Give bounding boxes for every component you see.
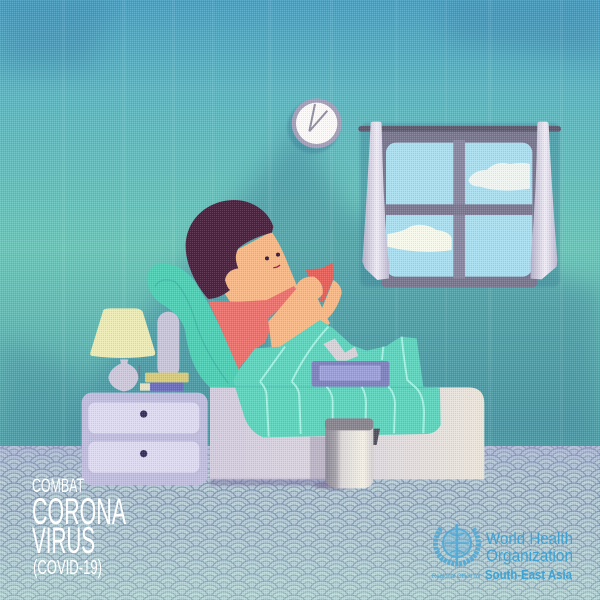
bed: [210, 387, 484, 485]
book: [306, 263, 334, 303]
lamp: [90, 308, 155, 391]
nightstand body: [82, 393, 208, 485]
blanket: [233, 320, 441, 437]
face: [220, 232, 297, 305]
WHO logo: [432, 524, 573, 582]
tissue paper: [323, 338, 358, 361]
trash can: [313, 418, 380, 489]
left hand: [296, 277, 323, 301]
eyes: [265, 256, 269, 260]
WHO logo: Organization: [486, 546, 573, 565]
books: [140, 373, 189, 391]
campaign title: COMBAT: [32, 476, 84, 497]
shirt: [208, 286, 297, 369]
pillow: [157, 312, 179, 378]
right hand: [320, 280, 342, 321]
wall background: [0, 0, 600, 450]
tissue box: [312, 361, 389, 387]
window: [358, 122, 561, 287]
hair: [186, 200, 273, 299]
arm: [268, 288, 330, 350]
campaign title: (COVID-19): [33, 557, 102, 579]
nightstand and items: [82, 308, 208, 485]
curtain rod: [358, 126, 561, 132]
WHO logo: Regional Office for: [432, 574, 481, 580]
WHO logo: South-East Asia: [485, 568, 573, 582]
campaign title: [32, 476, 126, 579]
right curtain: [531, 122, 557, 279]
campaign title: VIRUS: [32, 520, 95, 561]
window glass with sky and clouds: [386, 140, 532, 278]
ear: [224, 272, 241, 288]
organization name: World Health: [486, 529, 573, 548]
person reading: [186, 200, 342, 369]
carpet floor: [0, 446, 600, 600]
campaign title: CORONA: [32, 491, 126, 532]
left curtain: [362, 122, 389, 280]
mouth: [273, 265, 280, 268]
wall clock: [287, 98, 342, 153]
WHO emblem: [436, 524, 478, 564]
armchair backrest: [147, 263, 240, 387]
